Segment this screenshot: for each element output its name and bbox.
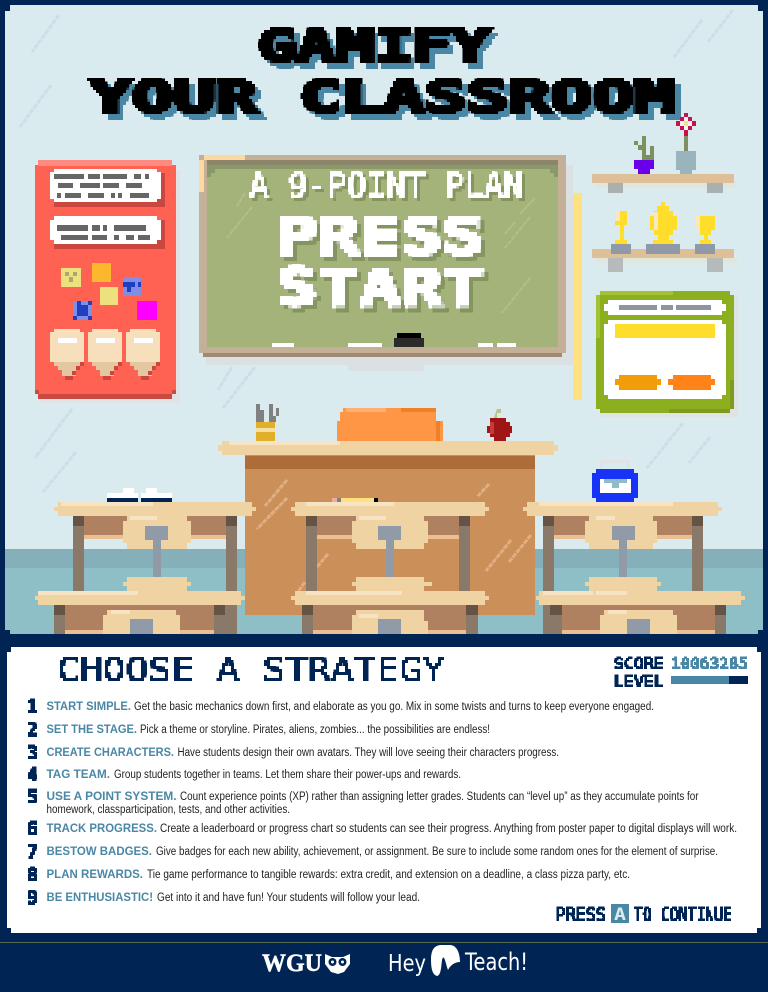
footer divider line [0, 942, 768, 943]
title: Gamify Your Classroom [90, 21, 681, 128]
item 4: Group students together in teams. Let them share their power-ups and rewards. [114, 769, 461, 781]
title: Gamify Your Classroom: YOUR CLASSROOM [95, 77, 681, 128]
item 5: USE A POINT SYSTEM. [46, 789, 176, 803]
logo: Hey Teach: Hey [388, 951, 426, 977]
board header card [604, 300, 726, 315]
item 7: BESTOW BADGES. [46, 844, 152, 858]
item 7: 7 [27, 841, 38, 863]
wall glare streaks [20, 10, 733, 492]
chalkboard heading: Press Start: START [280, 263, 488, 322]
front row of student desks [35, 591, 745, 634]
icon: cup trophy [695, 216, 715, 254]
icon: apple [487, 409, 512, 441]
shelf: plants [592, 113, 737, 193]
books on student desk [107, 488, 172, 502]
chalkboard heading: Press Start: PRESS [276, 208, 484, 267]
item 6: 6 [27, 818, 38, 840]
desk: front right [536, 591, 745, 634]
icon: large trophy [646, 202, 680, 254]
desk: front left [35, 591, 245, 634]
score and level readout: SCORE [614, 654, 664, 673]
board content card [604, 320, 726, 399]
logo: WGU: WGU [262, 950, 322, 977]
item 9: Get into it and have fun! Your students will follow your lead. [157, 892, 420, 904]
chalkboard heading: Press Start [276, 208, 488, 322]
icon: tree [431, 945, 460, 976]
desk: rear centre [291, 502, 489, 591]
desk front glare [257, 480, 531, 592]
item 9 [27, 887, 420, 909]
chalkboard heading: Press Start: START [276, 259, 484, 318]
icon: flower vase [676, 113, 696, 174]
press A to continue [556, 904, 732, 926]
item 4 [27, 764, 461, 786]
item 3: 3 [27, 742, 38, 764]
item 4: 4 [27, 764, 38, 786]
logo: Hey Teach: Teach! [464, 948, 528, 976]
item 7 [27, 841, 718, 863]
item 6 [27, 818, 737, 840]
chalkboard subtitle: A 9-POINT PLAN [249, 166, 523, 206]
item 1 [27, 696, 654, 718]
title: Gamify Your Classroom: GAMIFY [263, 26, 496, 77]
pencil on student desk [332, 498, 378, 502]
press A to continue: TO CONTINUE [634, 904, 732, 926]
item 3 [27, 742, 559, 764]
heading: choose a strategy: CHOOSE A STRATEGY [57, 650, 445, 689]
press A to continue: PRESS [556, 904, 606, 926]
desk: rear left [54, 502, 256, 591]
rear row of student desks [54, 502, 722, 591]
desk: front centre [291, 591, 489, 634]
icon: owl [325, 954, 350, 974]
press A to continue: A [614, 905, 626, 925]
item 8: PLAN REWARDS. [46, 867, 143, 881]
item 8 [27, 864, 630, 886]
panel: chalkboard [199, 155, 573, 371]
lunchbox on desk [592, 460, 638, 502]
item 5: homework, classparticipation, tests, and other activities. [46, 804, 290, 816]
item 3: Have students design their own avatars. They will love seeing their characters progress. [178, 747, 559, 759]
item 8: 8 [27, 864, 38, 886]
panel: classroom scene [5, 5, 763, 634]
score and level readout [614, 654, 748, 691]
score and level readout: LEVEL [614, 672, 664, 691]
item 5 [27, 786, 699, 816]
panel: red bulletin board [35, 160, 180, 403]
item 5: Count experience points (XP) rather than assigning letter grades. Students can “level up” as they accumulate points for [180, 791, 699, 803]
item 6: TRACK PROGRESS. [46, 821, 157, 835]
item 4: TAG TEAM. [46, 767, 110, 781]
logo: Hey Teach [388, 945, 528, 977]
panel: strategy list [7, 647, 761, 933]
orange box [337, 408, 443, 441]
yellow wall strip [573, 193, 582, 400]
item 2: Pick a theme or storyline. Pirates, aliens, zombies... the possibilities are endless! [140, 724, 490, 736]
item 9: 9 [27, 887, 38, 909]
title: Gamify Your Classroom: GAMIFY [258, 21, 491, 72]
chalkboard heading: Press Start: PRESS [280, 212, 488, 271]
item 1: 1 [27, 696, 38, 718]
item 3: CREATE CHARACTERS. [46, 745, 174, 759]
bottom-corner frame notches [5, 630, 763, 634]
item 2: SET THE STAGE. [46, 722, 137, 736]
item 1: START SIMPLE. [46, 699, 131, 713]
title: Gamify Your Classroom: YOUR CLASSROOM [90, 72, 676, 123]
item 2: 2 [27, 719, 38, 741]
pencil badges [50, 329, 160, 380]
item 5: 5 [27, 786, 38, 808]
score and level readout: 10063285 [671, 654, 748, 673]
icon: small trophy [611, 211, 631, 254]
chalkboard subtitle: A 9-POINT PLAN [252, 169, 526, 209]
notice card two [50, 216, 165, 249]
item 2 [27, 719, 490, 741]
icon: potted cactus [634, 136, 654, 174]
sticky notes [61, 263, 157, 320]
panel: green board [596, 291, 738, 417]
notice card one [50, 169, 165, 207]
teacher's desk [218, 404, 558, 615]
item 8: Tie game performance to tangible rewards: extra credit, and extension on a deadline, a class pizza party, etc. [147, 869, 630, 881]
shelf: trophies [592, 202, 737, 272]
item 1: Get the basic mechanics down first, and elaborate as you go. Mix in some twists and turns to keep everyone engaged. [134, 701, 654, 713]
icon: pencil cup [256, 404, 279, 441]
item 9: BE ENTHUSIASTIC! [46, 890, 153, 904]
desk: rear right [523, 502, 722, 591]
